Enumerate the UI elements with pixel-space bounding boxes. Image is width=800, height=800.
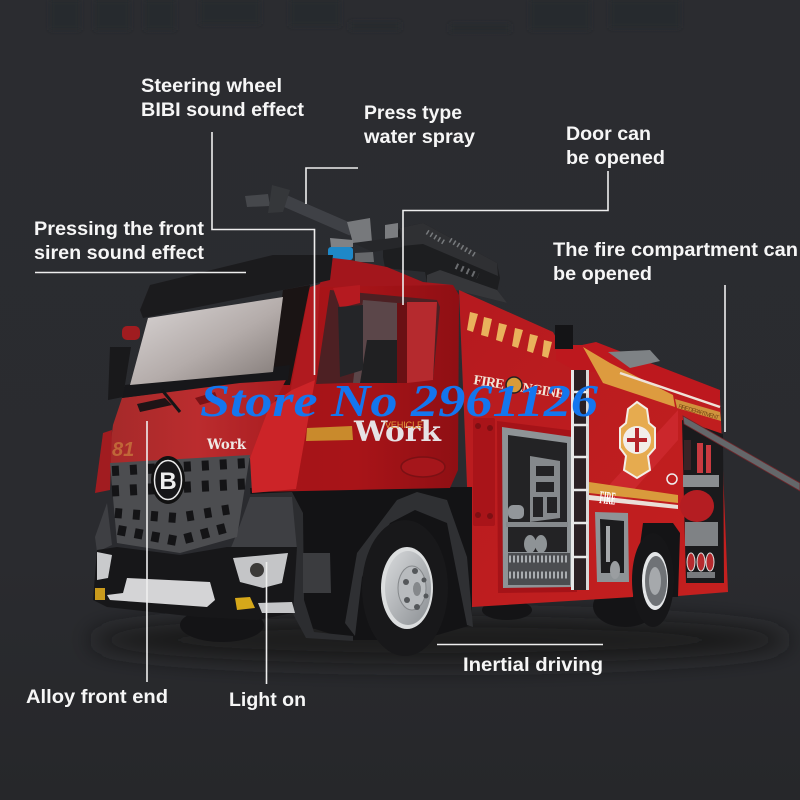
brand badge: B (159, 468, 177, 495)
label: front siren: siren sound effect (34, 242, 205, 264)
label: press type water spray: water spray (363, 126, 475, 148)
cab side door (254, 285, 459, 492)
label: steering wheel: Steering wheel (141, 75, 282, 97)
label: fire compartment: be opened (553, 263, 652, 285)
lower windscreen frame (122, 365, 290, 398)
door window (316, 290, 440, 384)
shine on body (600, 410, 678, 500)
leader: door (403, 171, 608, 305)
equipment compartment (497, 421, 577, 593)
rear box (459, 290, 728, 607)
bumper step (258, 602, 295, 613)
cab roof (317, 258, 453, 300)
front wheel (362, 520, 448, 656)
rear top details (555, 325, 720, 408)
label: inertial driving: Inertial driving (463, 654, 603, 676)
left mirror (108, 326, 140, 400)
left fog light (97, 552, 112, 580)
right fog light (233, 553, 288, 588)
leader: water spray (306, 168, 358, 204)
fire truck (93, 185, 800, 656)
front cowl shading (250, 380, 315, 493)
label: fire compartment: The fire compartment can (553, 239, 798, 261)
label: press type water spray: Press type (364, 102, 462, 124)
81 mark: 81 (112, 439, 134, 461)
dark side fairing (250, 492, 353, 641)
yellow side stripes (467, 312, 552, 358)
leader: front siren (35, 272, 246, 274)
white trim (620, 373, 720, 407)
faded ghost banner at top (50, 0, 680, 32)
label: door can be opened: Door can (566, 123, 651, 145)
black frame right of windshield (270, 285, 310, 385)
door work lettering: VEHICLE (385, 420, 423, 430)
leader: fire compartment (724, 285, 726, 432)
fire department strip: FIRE DEPARTMENT (677, 404, 720, 422)
store watermark: Store No 2961126 (200, 375, 598, 426)
rear wheel (632, 533, 674, 627)
label: door can be opened: be opened (566, 147, 665, 169)
rear compartment (680, 420, 724, 583)
fire emblem (620, 402, 655, 478)
side edge of front (95, 430, 112, 493)
windshield (130, 297, 283, 385)
orange door stripe (306, 426, 353, 441)
door pillar (290, 284, 320, 393)
leader: inertial driving (437, 644, 603, 646)
hidden far tyres (180, 585, 657, 642)
fire engine lettering: FIRE ENGINE (472, 373, 566, 402)
ladder (571, 370, 589, 590)
sun visor (140, 255, 333, 318)
blue beacon (328, 247, 353, 260)
bumper shoulders (95, 497, 297, 552)
leader: light on (266, 562, 268, 684)
fire stripe (589, 474, 678, 509)
silver bumper plate (107, 578, 215, 607)
label: front siren: Pressing the front (34, 218, 205, 240)
orange band (583, 347, 675, 407)
label: alloy front end: Alloy front end (26, 686, 168, 708)
small work badge: Work (206, 437, 246, 453)
water cannon (245, 185, 403, 262)
floor shadow (90, 616, 790, 664)
cab front panel (108, 376, 288, 464)
small compartment (595, 512, 629, 582)
leader: alloy front end (146, 421, 148, 682)
bolted side panel (473, 418, 495, 526)
label: light on: Light on (229, 689, 306, 711)
label: steering wheel: BIBI sound effect (141, 99, 305, 121)
brand badge (151, 456, 185, 504)
wheel arch (345, 492, 473, 636)
door work lettering: Work (353, 415, 442, 448)
grille (110, 455, 250, 553)
under-cab chassis (250, 487, 472, 640)
leader: steering wheel (212, 132, 314, 375)
lower bumper (93, 547, 297, 620)
rear wheel arch (633, 523, 680, 597)
water box on roof (383, 223, 507, 303)
extended hose strip (683, 416, 800, 491)
door handle (401, 457, 445, 477)
fire stripe: FIRE (599, 487, 617, 509)
left amber light (95, 588, 105, 600)
right amber light (235, 597, 255, 610)
front vents (137, 390, 218, 412)
door mirror (333, 285, 363, 377)
